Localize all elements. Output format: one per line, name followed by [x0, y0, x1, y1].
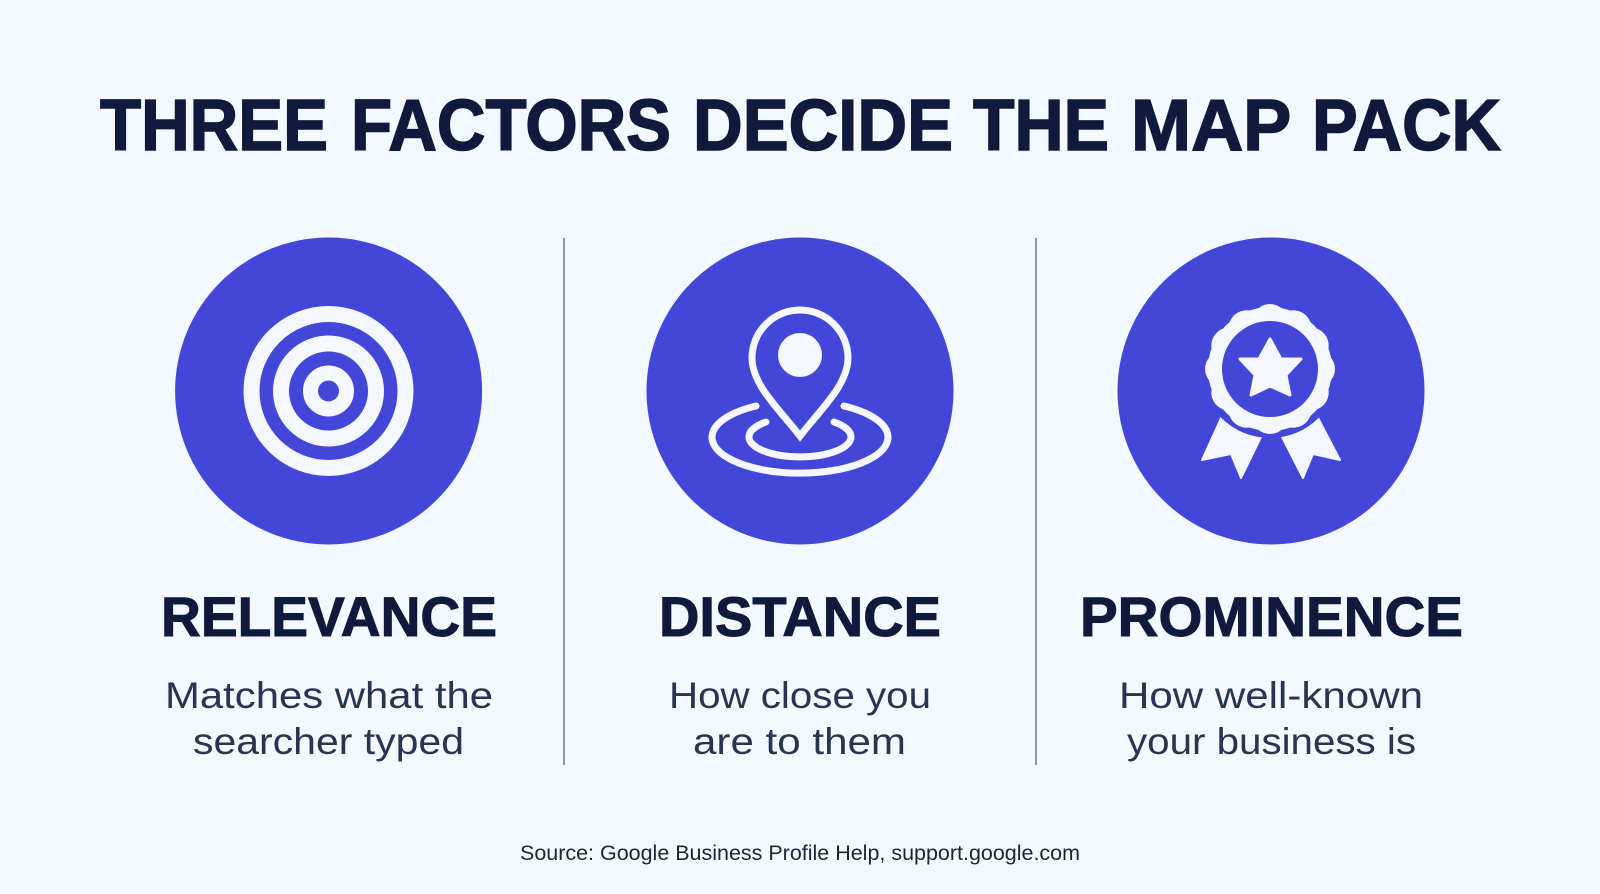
description: distance: are to them	[693, 721, 906, 762]
description: relevance: searcher typed	[193, 721, 464, 762]
description: prominence: How well-known	[1119, 675, 1423, 716]
title: THREE	[100, 86, 328, 166]
description: distance	[669, 675, 931, 762]
panel: prominence	[1080, 238, 1463, 762]
icon: target	[175, 238, 482, 544]
panel: distance	[646, 238, 954, 762]
heading: relevance: RELEVANCE	[161, 585, 497, 648]
panel: relevance	[161, 238, 497, 762]
icon: award badge	[1118, 238, 1424, 544]
source note: Source: Google Business Profile Help, support.google.com	[520, 842, 1080, 865]
title: FACTORS	[351, 86, 671, 166]
description: relevance	[165, 675, 493, 762]
title: PACK	[1312, 86, 1501, 166]
heading: prominence: PROMINENCE	[1080, 585, 1463, 648]
icon: map pin	[646, 238, 954, 544]
title: THE	[973, 86, 1109, 166]
description: relevance: Matches what the	[165, 675, 493, 716]
title: DECIDE	[693, 86, 953, 166]
title: MAP	[1131, 86, 1290, 166]
description: prominence: your business is	[1127, 721, 1416, 762]
heading: distance: DISTANCE	[659, 585, 941, 648]
description: distance: How close you	[669, 675, 931, 716]
description: prominence	[1119, 675, 1423, 762]
